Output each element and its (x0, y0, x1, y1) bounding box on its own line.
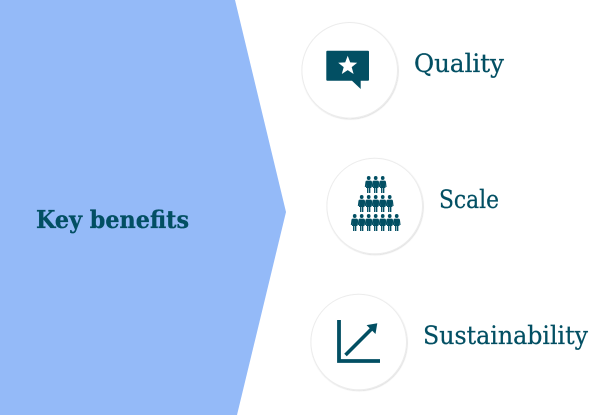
label: scale: Scale (439, 185, 499, 215)
icon: speech bubble with star (326, 51, 369, 89)
circle: sustainability (311, 294, 407, 390)
label: sustainability: Sustainability (423, 321, 589, 351)
circle: quality (302, 23, 398, 118)
circle: scale (327, 158, 423, 254)
icon: pyramid of people (351, 176, 401, 231)
panel: blue arrow (0, 0, 286, 415)
heading: key benefits: Key benefits (36, 205, 189, 234)
label: quality: Quality (414, 49, 505, 79)
icon: growth chart arrow (339, 320, 380, 361)
